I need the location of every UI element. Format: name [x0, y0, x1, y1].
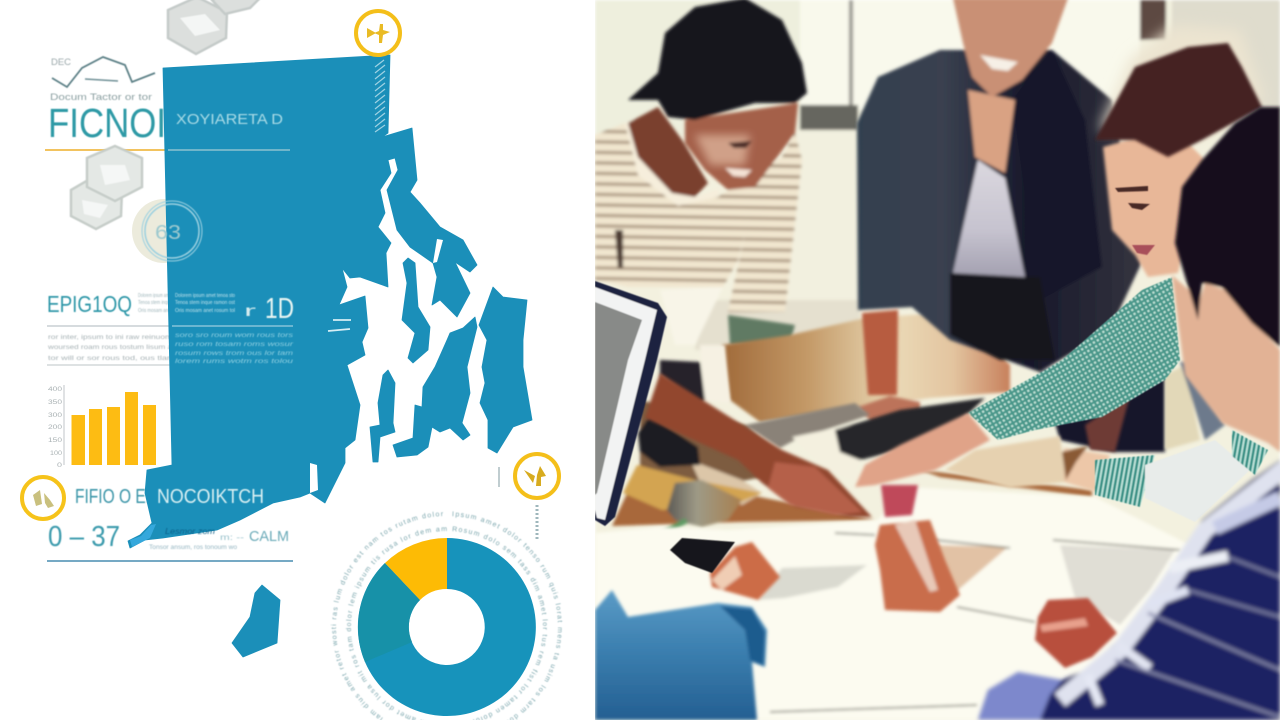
bright map tip — [130, 524, 156, 547]
hair halo — [1100, 25, 1265, 140]
top hexagon decorations — [168, 0, 262, 54]
stat text row left: Oris mosam anet — [138, 308, 173, 314]
white tee — [953, 160, 1025, 277]
small paragraph left: tor will or sor rous tod, ous tlan — [48, 356, 172, 362]
map divider — [168, 149, 290, 151]
ring and value on map — [142, 201, 202, 261]
donut segment: blue — [358, 538, 536, 716]
paper gap wedge — [758, 565, 867, 600]
donut chart — [358, 538, 536, 716]
stat text row left: EPIG1OQ — [47, 291, 132, 317]
bottom divider — [47, 560, 293, 562]
laptop screen — [595, 302, 642, 495]
green strip — [664, 518, 688, 530]
foreground striped sweater — [978, 460, 1280, 720]
stat text on map: Oris mosam anet rosum tol — [175, 308, 235, 314]
yellow icon: right — [499, 454, 559, 541]
dark wallet — [835, 398, 985, 460]
photo background wall and window — [595, 0, 1280, 543]
face — [1103, 130, 1205, 277]
cream paper — [791, 424, 864, 462]
laptop bezel — [595, 287, 657, 520]
circular text around donut — [330, 511, 563, 720]
stat text on map: Dolorem ipsum amet tenoa sto — [175, 293, 235, 299]
text band over map: NOCOIKTCH — [157, 486, 264, 508]
collar — [628, 118, 702, 208]
grey divider — [47, 325, 172, 327]
text band left part: CALM — [249, 528, 289, 545]
hatched stripe on map — [375, 60, 385, 132]
text band left part: m: -- — [220, 533, 244, 542]
island: small west — [370, 370, 395, 462]
eye and brow — [1115, 186, 1150, 210]
small paragraph left: woursed roam rous tostum lisum a — [47, 345, 173, 351]
left infographic panel background — [0, 0, 595, 720]
bar chart axis: 0 — [57, 463, 63, 469]
chest — [968, 90, 1015, 173]
tan table gap — [935, 545, 1008, 597]
hand on paper lower right — [1035, 598, 1117, 668]
yellow folder — [623, 465, 762, 510]
dark table backing — [638, 399, 762, 483]
island: Aquidneck east — [479, 287, 532, 453]
smile — [725, 168, 752, 177]
text band left part — [48, 486, 289, 553]
island: Prudence — [402, 258, 430, 363]
face — [953, 0, 1068, 97]
lower left blue sleeve — [595, 590, 767, 720]
donut segment: teal — [358, 563, 420, 662]
second hand with bracelet — [945, 436, 1110, 492]
orange divider — [45, 149, 168, 151]
paper fold lines — [770, 533, 1180, 712]
smile — [980, 55, 1018, 71]
yellow icon: left — [22, 477, 64, 519]
small paragraph left: ror inter, ipsum to ini raw reinuom — [48, 335, 172, 341]
map of Rhode Island — [128, 55, 532, 657]
yellow icon: top — [356, 11, 400, 55]
laptop frame — [595, 281, 667, 526]
text band left part: 0 – 37 — [48, 521, 120, 553]
hair — [1095, 43, 1262, 157]
bar chart — [48, 385, 156, 469]
ring and value on map: 63 — [155, 222, 181, 244]
light hand on table — [855, 413, 990, 487]
white undershirt — [663, 290, 719, 344]
eye — [728, 141, 752, 148]
line chart with caption — [50, 57, 155, 102]
map label marks — [328, 320, 351, 331]
pale pie decoration — [132, 199, 196, 263]
stat text on map — [175, 293, 294, 325]
line chart with caption: Docum Tactor or tor — [50, 92, 152, 102]
lower left hand — [710, 542, 780, 600]
dark bag bottom — [638, 415, 700, 467]
circular text around donut: Rosum dolo sem tass dim amet lor tus rem fist lor tamen dolor rum lis tam amet dor lusa mit ros tam dolor lem ipsum tis rusa lor dem amet tas lum dis ipsum tor rum sit amet dol tis rem lusa ipsum tam dor lamet sor rum tis amet lor dus tem — [346, 526, 548, 720]
hair — [628, 0, 807, 120]
striped top — [595, 123, 802, 312]
face highlight — [695, 135, 750, 165]
green cuff — [728, 315, 795, 345]
navy body — [978, 460, 1280, 720]
woman in striped top — [595, 0, 807, 345]
stat text on map: 1D — [265, 293, 294, 325]
white inlet on map — [310, 463, 318, 493]
white shirt sleeve with green cuffs — [1095, 430, 1268, 522]
round object — [667, 480, 742, 527]
white papers — [595, 487, 1280, 720]
hand on table — [858, 394, 922, 421]
bar chart axis: 400 — [48, 387, 63, 393]
lilac sleeve — [978, 672, 1062, 720]
wood table — [610, 492, 874, 528]
black object on paper — [670, 538, 735, 573]
small paragraph on map: lorem rums wotm ros tolou — [175, 358, 294, 365]
white sleeve behind arm — [700, 345, 730, 403]
woman in dark cardigan — [857, 0, 1142, 432]
sleeve gap — [615, 230, 623, 268]
bar chart axis: 150 — [48, 438, 63, 444]
laptop — [595, 281, 667, 526]
mid hexagon cluster — [71, 146, 142, 229]
wood strip under hands — [920, 470, 1092, 497]
mainland — [128, 55, 477, 548]
small paragraph on map: ruso rom tosam roms wosur — [175, 341, 294, 348]
team photograph — [595, 0, 1280, 720]
dark bag top — [660, 360, 705, 405]
reaching brown arm and hand — [645, 373, 872, 517]
cardigan — [857, 50, 1142, 372]
dark caption on map edge: Lesmor zom — [165, 527, 215, 536]
dark background behind arms — [1038, 364, 1168, 455]
central hand holding pen — [875, 485, 960, 612]
skin behind green sleeve — [1085, 395, 1130, 452]
neck and ear — [1172, 275, 1280, 452]
patterned paper — [690, 460, 762, 505]
forearm — [862, 310, 898, 395]
white sweater bands — [1060, 468, 1280, 717]
lips — [1132, 245, 1155, 255]
bar chart axis: 200 — [48, 425, 63, 431]
stat text on map: Tenoa stem inque ramon ost — [175, 300, 235, 306]
dark hair — [1175, 107, 1280, 347]
stat text row left: Dolorem ipsum amet — [138, 293, 172, 299]
person in foreground — [1172, 107, 1280, 452]
small paragraph left — [47, 335, 173, 362]
small paragraph on map: rosum rows trom ous lor tam — [175, 350, 294, 357]
bar chart axis: 350 — [48, 400, 63, 406]
face — [685, 103, 798, 190]
bar chart axis: 100 — [50, 451, 63, 457]
green sweater sleeve — [968, 277, 1180, 440]
white sliver over small island — [433, 239, 443, 263]
line chart with caption: DEC — [51, 57, 72, 67]
long dark hair — [1017, 50, 1101, 289]
island: Block Island — [232, 585, 280, 657]
small paragraph on map: soro sro roum wom rous tors — [175, 332, 294, 339]
bar chart axis — [48, 385, 64, 469]
stat text on map: r — [244, 303, 258, 320]
dark trousers — [950, 273, 1055, 360]
island: Conanicut centre — [393, 317, 477, 457]
text band left part: Tonsor ansum, ros tonoum wo — [149, 545, 238, 551]
bars — [72, 392, 156, 465]
woman with red hair — [1095, 25, 1265, 277]
grey tabletop — [745, 403, 870, 448]
bar chart axis: 300 — [48, 413, 63, 419]
small paragraph on map — [175, 332, 294, 365]
stat text row left: Tenoa stem inque — [138, 300, 172, 306]
map divider two — [172, 325, 293, 327]
text band left part: FIFIO O E: — [75, 486, 150, 508]
neck — [628, 107, 708, 197]
donut segment: yellow — [385, 538, 447, 600]
heading text: FICNOI — [48, 100, 166, 146]
cardboard roll — [722, 310, 1010, 422]
table and desk items — [612, 345, 1092, 535]
grey page shadow — [1060, 545, 1175, 625]
heading on map: XOYIARETA D — [176, 111, 283, 128]
cream gap and strap — [1165, 362, 1225, 450]
